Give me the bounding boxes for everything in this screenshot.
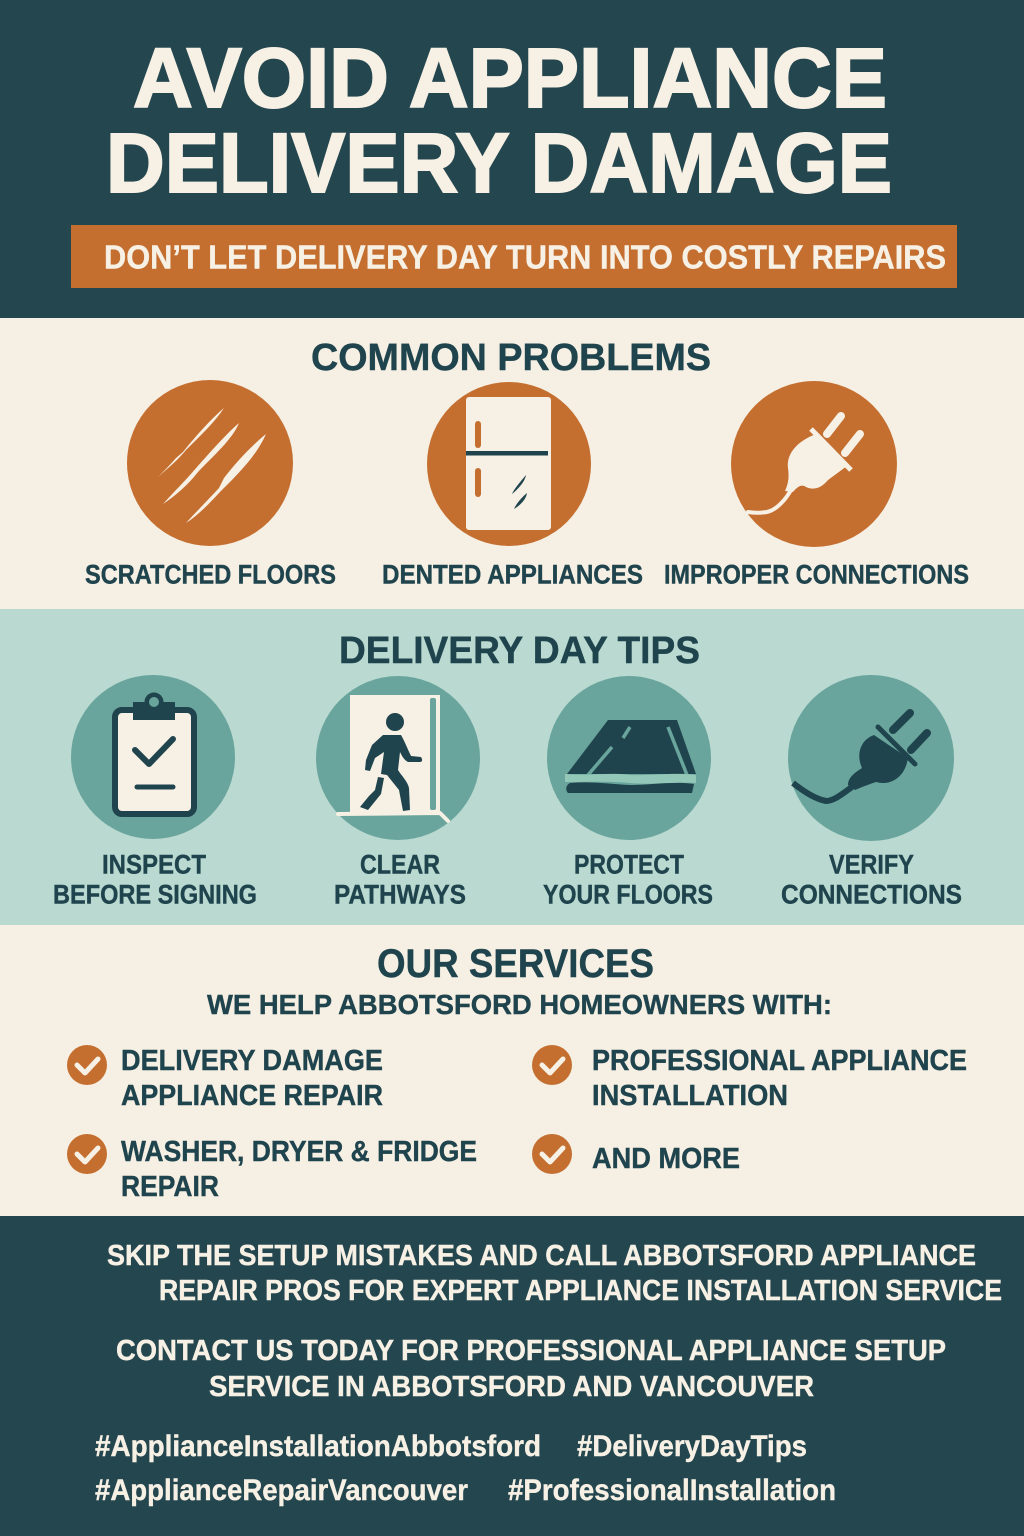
subheading: WE HELP ABBOTSFORD HOMEOWNERS WITH: <box>207 989 832 1020</box>
label: inspect before signing: INSPECT <box>102 850 206 880</box>
service: professional appliance installation: INSTALLATION <box>592 1080 788 1112</box>
service: professional appliance installation: PROFESSIONAL APPLIANCE <box>592 1045 967 1077</box>
label: verify connections: CONNECTIONS <box>781 880 962 910</box>
text: skip the setup mistakes <box>107 1240 1002 1307</box>
panel: header <box>0 0 1024 318</box>
icon: verify plug <box>788 675 954 841</box>
service: washer, dryer and fridge repair: WASHER, DRYER & FRIDGE <box>121 1136 477 1168</box>
label: verify connections <box>781 850 962 910</box>
label: clear pathways: PATHWAYS <box>334 880 466 910</box>
service: and more <box>532 1134 740 1175</box>
panel: common problems <box>0 318 1024 609</box>
title <box>106 31 892 210</box>
service: professional appliance installation <box>532 1045 967 1112</box>
label: verify connections: VERIFY <box>829 850 914 880</box>
service: and more: AND MORE <box>592 1143 740 1175</box>
hashtags: #DeliveryDayTips <box>577 1430 807 1463</box>
heading: common problems: COMMON PROBLEMS <box>311 337 711 379</box>
hashtags: #ApplianceRepairVancouver <box>95 1474 468 1507</box>
heading: delivery day tips: DELIVERY DAY TIPS <box>339 630 700 672</box>
icon: clipboard <box>71 675 235 839</box>
title: AVOID APPLIANCE <box>133 31 887 125</box>
subtitle banner <box>71 225 957 288</box>
text: contact us today: CONTACT US TODAY FOR PROFESSIONAL APPLIANCE SETUP <box>116 1335 946 1367</box>
icon: plug <box>731 381 897 547</box>
icon: scratched floor <box>127 380 293 546</box>
label: dented appliances: DENTED APPLIANCES <box>382 560 643 590</box>
service: delivery damage appliance repair <box>67 1045 383 1112</box>
icon: clear doorway with person <box>316 676 480 840</box>
icon: dented fridge <box>427 382 591 546</box>
text: contact us today <box>116 1335 946 1403</box>
hashtags: #ProfessionalInstallation <box>508 1474 836 1507</box>
service: washer, dryer and fridge repair <box>67 1134 477 1203</box>
hashtags: #ApplianceInstallationAbbotsford <box>95 1430 541 1463</box>
label: protect your floors <box>543 850 713 910</box>
service: washer, dryer and fridge repair: REPAIR <box>121 1171 219 1203</box>
text: contact us today: SERVICE IN ABBOTSFORD AND VANCOUVER <box>209 1371 814 1403</box>
service: delivery damage appliance repair: APPLIANCE REPAIR <box>121 1080 383 1112</box>
label: protect your floors: PROTECT <box>574 850 684 880</box>
label: improper connections: IMPROPER CONNECTIONS <box>664 560 969 590</box>
service: delivery damage appliance repair: DELIVERY DAMAGE <box>121 1045 383 1077</box>
text: skip the setup mistakes: SKIP THE SETUP MISTAKES AND CALL ABBOTSFORD APPLIANCE <box>107 1240 976 1272</box>
label: clear pathways <box>334 850 466 910</box>
panel: footer <box>0 1216 1024 1536</box>
label: scratched floors: SCRATCHED FLOORS <box>85 560 336 590</box>
label: inspect before signing: BEFORE SIGNING <box>53 880 257 910</box>
title: DELIVERY DAMAGE <box>106 116 892 210</box>
label: clear pathways: CLEAR <box>360 850 440 880</box>
subtitle banner: DON’T LET DELIVERY DAY TURN INTO COSTLY REPAIRS <box>104 238 946 276</box>
icon: floor protection <box>547 676 711 840</box>
heading: our services: OUR SERVICES <box>377 942 654 986</box>
label: protect your floors: YOUR FLOORS <box>543 880 713 910</box>
hashtags <box>95 1430 836 1507</box>
panel: delivery day tips <box>0 609 1024 925</box>
panel: our services <box>0 925 1024 1216</box>
label: inspect before signing <box>53 850 257 910</box>
